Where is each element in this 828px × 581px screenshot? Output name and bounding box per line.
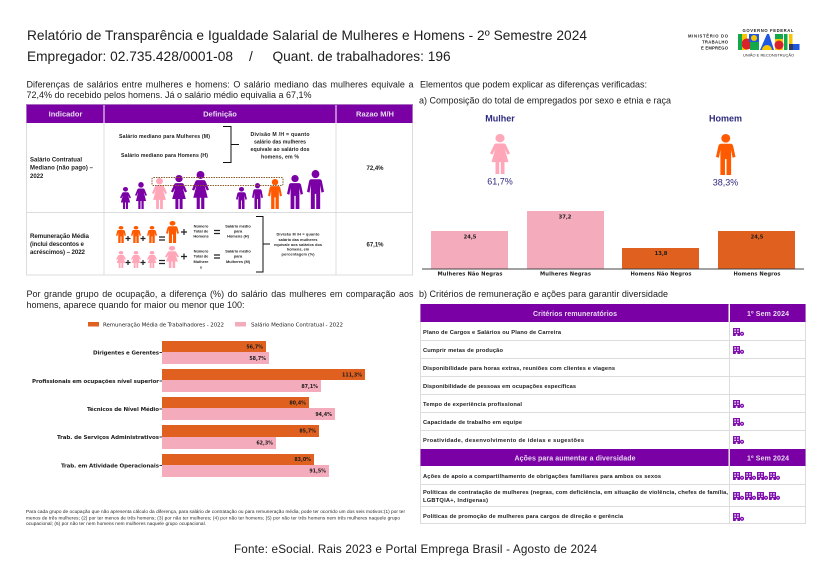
icons: people ordered by salary, women xyxy=(120,171,209,209)
definition: average pay ratio: homens, em xyxy=(287,248,310,252)
table header: Indicador xyxy=(49,110,82,118)
legend: Salário Mediano Contratual - 2022 xyxy=(251,322,343,328)
formula: average pay for men: para xyxy=(234,228,243,234)
formula: average pay for women: Número xyxy=(194,248,209,254)
median highlight box xyxy=(152,178,283,186)
definition: salário mediano formula: Divisão M /H = quanto xyxy=(250,132,310,138)
footnote: menos de três mulheres; (2) por ter menos de três homens; (3) por não ter mulheres; (4) por não ter homens; (5) por não ter três homens nem três mulheres naquele grupo xyxy=(26,516,400,520)
row: plano de cargos: Plano de Cargos e Salários ou Plano de Carreira xyxy=(423,330,562,336)
logo: Ministério do Trabalho e Emprego: MINISTÉRIO DO xyxy=(688,34,729,38)
value: 72,4%: 72,4% xyxy=(366,166,384,172)
row: plano de cargos xyxy=(423,328,743,336)
intro text: salary differences: 72,4% do recebido pelos homens. Já o salário médio equivalia a 67,1% xyxy=(26,90,312,100)
row label: remuneração média xyxy=(30,233,90,256)
formula: average pay for men: Número xyxy=(194,224,209,228)
formula: average pay for women xyxy=(116,246,251,270)
panel: man share xyxy=(709,114,742,188)
panel: man share: 38,3% xyxy=(713,178,738,188)
definition: average pay ratio: salário das mulheres xyxy=(278,238,318,242)
title: Empregador: 02.735.428/0001-08 xyxy=(27,49,233,64)
bar chart: composition by sex and race: 13,8 xyxy=(655,251,668,257)
intro text: salary differences xyxy=(26,80,414,100)
formula: average pay for men: Homens xyxy=(193,234,209,238)
formula: average pay for women: Salário médio xyxy=(225,248,251,254)
panel: man share: Homem xyxy=(709,114,742,124)
title: / xyxy=(249,49,253,64)
row: políticas de contratação xyxy=(423,490,779,504)
header: ações para diversidade xyxy=(420,449,806,466)
row: disponibilidade horas extras: Disponibilidade para horas extras, reuniões com clientes e viagens xyxy=(423,366,615,372)
header: ações para diversidade: Ações para aumentar a diversidade xyxy=(514,456,636,462)
definition: salário mediano formula xyxy=(119,126,310,162)
bar chart: composition by sex and race: 24,5 xyxy=(464,234,477,240)
title: Quant. de trabalhadores: 196 xyxy=(272,49,451,64)
row label: remuneração média: Remuneração Média xyxy=(30,233,90,240)
footnote: ocupacional; (6) por não ter nem homens nem mulheres naquele grupo ocupacional. xyxy=(26,521,206,526)
row label: salário contratual mediano: Salário Contratual xyxy=(30,158,82,164)
bars: Profissionais: Profissionais em ocupações nível superior xyxy=(32,378,159,385)
formula: average pay for women: Mulhere xyxy=(194,259,209,264)
legend: Remuneração Média de Trabalhadores - 2022 xyxy=(103,322,224,328)
table header xyxy=(26,105,412,123)
definition: salário mediano formula: Salário mediano para Mulheres (M) xyxy=(119,134,210,140)
formula: average pay for men: Total de xyxy=(194,228,209,234)
header: critérios remuneratórios: Critérios remuneratórios xyxy=(533,311,617,318)
bars: Serviços Administrativos: 62,3% xyxy=(256,440,273,446)
formula: average pay for women: Mulheres (M) xyxy=(226,259,251,264)
bars: Técnicos de Nível Médio xyxy=(87,397,335,420)
row: políticas de promoção xyxy=(423,513,743,521)
icons: people ordered by salary, men xyxy=(236,170,324,209)
row: metas de produção xyxy=(423,346,743,354)
bars: Serviços Administrativos: Trab. de Serviços Administrativos xyxy=(57,435,160,441)
row: políticas de contratação: Políticas de contratação de mulheres (negras, com deficiência, em situação de violência, chefes de família, xyxy=(423,490,728,496)
logo: Ministério do Trabalho e Emprego xyxy=(688,34,729,50)
footnote xyxy=(26,509,405,526)
row: obrigações familiares xyxy=(423,472,779,480)
formula: average pay for women: para xyxy=(234,254,243,258)
panel: indicators table xyxy=(26,104,413,275)
logo: Governo Federal Brasil xyxy=(738,28,800,58)
row: tempo de experiência xyxy=(423,400,743,408)
formula: average pay for men: Salário médio xyxy=(225,224,251,228)
heading: explaining elements xyxy=(419,80,671,106)
header: critérios remuneratórios xyxy=(420,304,806,322)
bars: Serviços Administrativos: 85,7% xyxy=(299,428,316,434)
footnote: Para cada grupo de ocupação que não apresenta cálculo da diferença, para salário de contratação ou para remuneração média, pode ter ocorrido um dos seis motivos:(1) por ter xyxy=(26,509,405,514)
bars: Dirigentes e Gerentes xyxy=(93,341,269,364)
bars: Profissionais xyxy=(32,369,365,392)
bars: Dirigentes e Gerentes: 56,7% xyxy=(246,344,263,350)
bars: Técnicos de Nível Médio: 94,4% xyxy=(315,412,332,418)
definition: salário mediano formula: salário das mulheres xyxy=(254,140,306,146)
bars: Atividade Operacionais: 91,5% xyxy=(309,468,326,474)
bars: Técnicos de Nível Médio: Técnicos de Nível Médio xyxy=(87,406,159,413)
legend xyxy=(88,322,343,328)
formula: average pay for men: Homens (H) xyxy=(227,234,250,238)
formula: average pay for women: s xyxy=(200,264,202,270)
header: critérios remuneratórios: 1º Sem 2024 xyxy=(747,311,789,318)
logo: Governo Federal Brasil: GOVERNO FEDERAL xyxy=(742,28,794,33)
row: proatividade: Proatividade, desenvolvimento de ideias e sugestões xyxy=(423,438,584,444)
definition: salário mediano formula: homens, em % xyxy=(261,154,299,160)
source note: Fonte: eSocial. Rais 2023 e Portal Emprega Brasil - Agosto de 2024 xyxy=(234,543,597,556)
formula: average pay for women: Total de xyxy=(194,254,209,258)
heading: explaining elements: a) Composição do total de empregados por sexo e etnia e raça xyxy=(419,96,671,106)
panel: woman share: 61,7% xyxy=(487,176,513,186)
table header: Razao M/H xyxy=(356,110,394,118)
intro text: occupation groups xyxy=(26,289,414,310)
panel: woman share xyxy=(485,114,515,186)
row label: salário contratual mediano: Mediano (não pago) – xyxy=(30,166,94,172)
bars: Atividade Operacionais xyxy=(61,454,329,477)
heading: explaining elements: Elementos que podem explicar as diferenças verificadas: xyxy=(420,80,647,90)
row: proatividade xyxy=(423,436,743,444)
definition: average pay ratio: porcentagem (%) xyxy=(282,252,315,256)
logo: Ministério do Trabalho e Emprego: E EMPREGO xyxy=(701,46,729,50)
row: obrigações familiares: Ações de apoio a compartilhamento de obrigações familiares para ambos os sexos xyxy=(423,474,661,480)
intro text: occupation groups: homens, aparece quando for maior ou menor que 100: xyxy=(26,300,244,310)
title xyxy=(27,28,587,64)
row: tempo de experiência: Tempo de experiência profissional xyxy=(423,402,522,408)
bar chart: composition by sex and race: Homens Negros xyxy=(734,272,780,278)
heading: criteria and actions: b) Critérios de remuneração e ações para garantir diversidade xyxy=(419,289,668,299)
definition: average pay ratio: equivale aos salários dos xyxy=(274,243,322,247)
logo: Ministério do Trabalho e Emprego: TRABALHO xyxy=(702,40,729,44)
panel: woman share: Mulher xyxy=(485,114,515,124)
row: disponibilidade de pessoas: Disponibilidade de pessoas em ocupações específicas xyxy=(423,384,576,390)
bar chart: composition by sex and race: Homens Não Negros xyxy=(630,272,692,278)
row: trabalho em equipe: Capacidade de trabalho em equipe xyxy=(423,420,522,426)
row: políticas de contratação: LGBTQIA+, Indígenas) xyxy=(423,498,488,504)
bars: Dirigentes e Gerentes: 58,7% xyxy=(249,356,266,362)
definition: salário mediano formula: equivale ao salário dos xyxy=(250,147,310,153)
definition: average pay ratio: Divisão M /H = quanto xyxy=(276,232,320,236)
panel: criteria table xyxy=(420,304,806,524)
definition: salário mediano formula: Salário mediano para Homens (H) xyxy=(121,153,208,159)
bars: Técnicos de Nível Médio: 80,4% xyxy=(289,400,306,406)
bar chart: composition by sex and race xyxy=(422,211,804,278)
value: 67,1%: 67,1% xyxy=(366,242,384,248)
row label: remuneração média: acréscimos) – 2022 xyxy=(30,249,86,256)
bars: Atividade Operacionais: 83,0% xyxy=(294,457,311,463)
title: Relatório de Transparência e Igualdade Salarial de Mulheres e Homens - 2º Semestre 2024 xyxy=(27,28,587,43)
row label: salário contratual mediano xyxy=(30,158,94,180)
intro text: salary differences: Diferenças de salários entre mulheres e homens: O salário mediano das mulheres equivale a xyxy=(26,80,414,90)
row label: salário contratual mediano: 2022 xyxy=(30,174,44,180)
bar chart: composition by sex and race: Mulheres Negras xyxy=(540,272,591,278)
bars: Profissionais: 87,1% xyxy=(301,384,318,390)
bar chart: occupation groups xyxy=(32,341,365,477)
row: metas de produção: Cumprir metas de produção xyxy=(423,348,504,354)
table header: Definição xyxy=(203,110,237,118)
row: políticas de promoção: Políticas de promoção de mulheres para cargos de direção e gerência xyxy=(423,514,624,520)
row: trabalho em equipe xyxy=(423,418,743,426)
row label: remuneração média: (inclui descontos e xyxy=(30,241,85,248)
intro text: occupation groups: Por grande grupo de ocupação, a diferença (%) do salário das mulheres em comparação aos xyxy=(26,289,414,299)
bars: Atividade Operacionais: Trab. em Atividade Operacionais xyxy=(61,464,160,470)
bar chart: composition by sex and race: 24,5 xyxy=(751,234,764,240)
bar chart: composition by sex and race: 37,2 xyxy=(559,214,572,220)
bars: Profissionais: 111,3% xyxy=(342,372,362,378)
formula: average pay for men xyxy=(116,221,251,243)
header: ações para diversidade: 1º Sem 2024 xyxy=(747,456,789,462)
bars: Serviços Administrativos xyxy=(57,425,319,449)
definition: average pay ratio xyxy=(256,216,322,272)
bars: Dirigentes e Gerentes: Dirigentes e Gerentes xyxy=(93,350,160,356)
logo: Governo Federal Brasil: UNIÃO E RECONSTRUÇÃO xyxy=(743,52,794,58)
bar chart: composition by sex and race: Mulheres Não Negras xyxy=(438,272,502,278)
